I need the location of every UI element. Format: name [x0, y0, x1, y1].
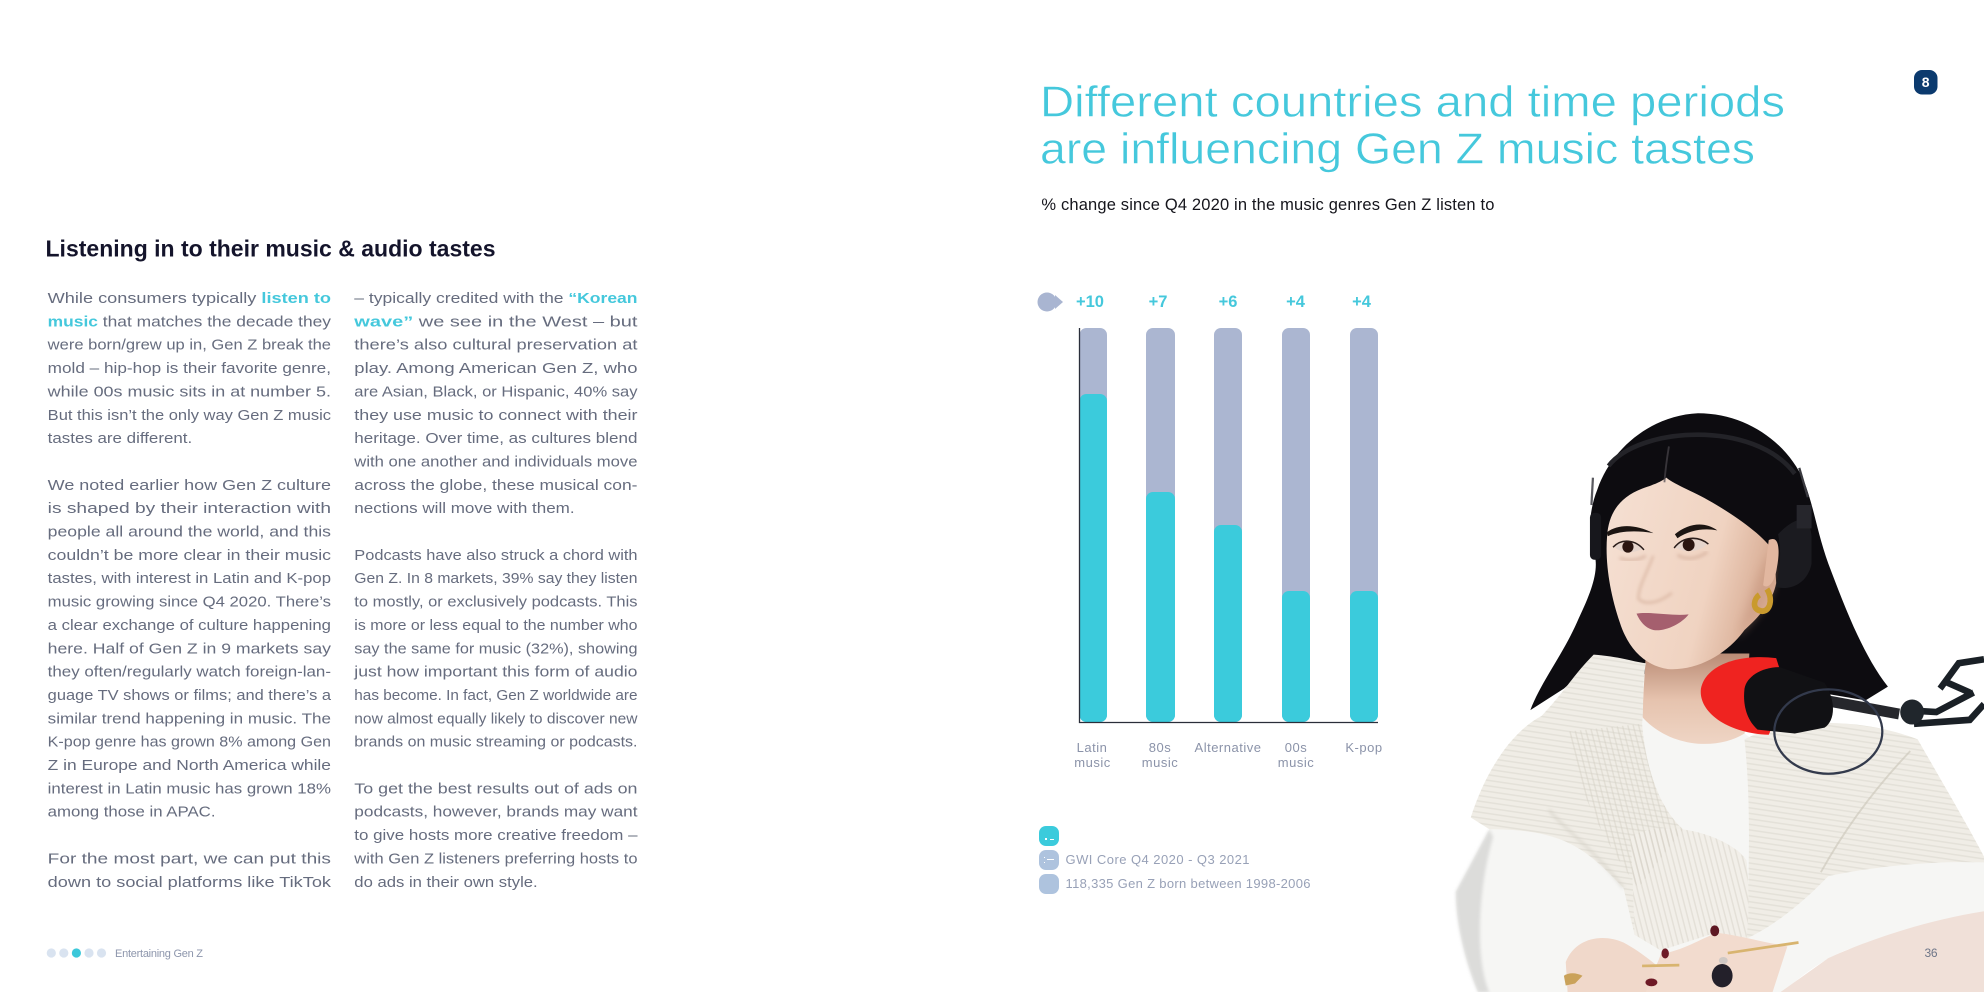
headphones — [1590, 435, 1812, 588]
text column 1: music that matches the decade they — [48, 313, 332, 330]
bar: 80s music — [1146, 328, 1175, 722]
text column 1: similar trend happening in music. The — [48, 710, 331, 727]
text column 1: Z in Europe and North America while — [48, 757, 331, 774]
badge: chart number 8: 8 — [1922, 74, 1930, 90]
bar chart — [1038, 292, 1383, 770]
ear — [1763, 539, 1779, 586]
value labels: +6 — [1219, 293, 1237, 311]
title: Different countries and time periods — [1040, 78, 1785, 127]
text column 2: to give hosts more creative freedom – — [354, 827, 638, 844]
footer: section progress dots and label: Entertaining Gen Z — [115, 948, 203, 960]
text column 1: We noted earlier how Gen Z culture — [48, 477, 331, 494]
text column 2: they use music to connect with their — [354, 407, 638, 424]
text column 2: wave” we see in the West – but — [353, 313, 639, 330]
icon: legend marker — [1038, 292, 1063, 312]
text column 1: tastes, with interest in Latin and K-pop — [48, 570, 331, 587]
microphone — [1701, 657, 1984, 774]
legend and source notes — [1039, 826, 1310, 894]
hands holding pencil — [1564, 925, 1799, 992]
page number: 36 — [1924, 946, 1938, 960]
text column 2: podcasts, however, brands may want — [354, 804, 638, 821]
heading: Listening in: Listening in to their music & audio tastes — [46, 236, 496, 262]
text column 1: While consumers typically listen to — [48, 290, 331, 307]
text column 1: here. Half of Gen Z in 9 markets say — [48, 640, 332, 657]
bar: 00s music — [1282, 328, 1310, 722]
text column 1: For the most part, we can put this — [48, 850, 331, 867]
lips — [1637, 613, 1689, 630]
t-shirt — [1456, 716, 1984, 992]
value labels: +7 — [1149, 293, 1167, 311]
sweater — [1471, 655, 1984, 950]
text column 1: is shaped by their interaction with — [48, 500, 331, 517]
text column 2: across the globe, these musical con- — [354, 477, 638, 494]
bar: Latin music — [1080, 328, 1107, 722]
text column 2: just how important this form of audio — [353, 664, 638, 681]
text column 1: couldn’t be more clear in their music — [48, 547, 332, 564]
text column 2: to mostly, or exclusively podcasts. This — [354, 594, 638, 611]
category labels — [1074, 740, 1383, 770]
value labels: +4 — [1352, 293, 1372, 311]
text column 2: do ads in their own style. — [354, 874, 538, 891]
text column 2: heritage. Over time, as cultures blend — [354, 430, 638, 447]
text column 2: play. Among American Gen Z, who — [354, 360, 638, 377]
text column 2: is more or less equal to the number who — [354, 617, 638, 634]
text column 1: music growing since Q4 2020. There’s — [48, 594, 331, 611]
nose — [1638, 556, 1672, 603]
badge: chart number 8 — [1914, 70, 1938, 94]
base note: 118,335 Gen Z born between 1998-2006 — [1066, 876, 1310, 891]
subtitle: % change since Q4 2020 in the music genres Gen Z listen to — [1041, 196, 1494, 214]
text column 1: down to social platforms like TikTok — [48, 874, 332, 891]
text column 1: interest in Latin music has grown 18% — [48, 780, 331, 797]
text column 1: guage TV shows or films; and there’s a — [48, 687, 332, 704]
base note — [1039, 874, 1310, 894]
text column 1: they often/regularly watch foreign-lan- — [48, 664, 331, 681]
hair — [1530, 413, 1888, 710]
text column 2: with Gen Z listeners preferring hosts to — [353, 850, 638, 867]
category labels: 80s — [1149, 740, 1171, 755]
text column 1: were born/grew up in, Gen Z break the — [47, 337, 331, 354]
category labels: music — [1142, 755, 1178, 770]
text column 1: while 00s music sits in at number 5. — [47, 383, 331, 400]
hair parting and shine — [1664, 446, 1669, 482]
category labels: music — [1278, 755, 1314, 770]
text column 2 — [353, 290, 639, 891]
text column 2: Gen Z. In 8 markets, 39% say they listen — [354, 570, 638, 587]
eyebrows — [1607, 524, 1717, 538]
face — [1607, 478, 1776, 669]
text column 2: – typically credited with the “Korean — [354, 290, 638, 307]
footer: section progress dots and label — [47, 948, 203, 960]
text column 2: Podcasts have also struck a chord with — [354, 547, 638, 564]
category labels: K-pop — [1345, 740, 1383, 755]
category labels: 00s — [1285, 740, 1307, 755]
value labels: +10 — [1076, 293, 1104, 311]
text column 2: there’s also cultural preservation at — [354, 337, 638, 354]
text column 1: a clear exchange of culture happening — [48, 617, 331, 634]
photo: woman with headphones at red microphone — [1456, 413, 1984, 992]
text column 2: now almost equally likely to discover new — [354, 710, 638, 727]
right arm — [1780, 911, 1984, 992]
source note: GWI Core Q4 2020 - Q3 2021 — [1066, 852, 1250, 867]
text column 2: brands on music streaming or podcasts. — [354, 734, 638, 751]
neck — [1642, 653, 1749, 747]
eyes — [1613, 538, 1708, 560]
title: are influencing Gen Z music tastes — [1040, 124, 1755, 173]
source note — [1039, 850, 1250, 870]
text column 2: are Asian, Black, or Hispanic, 40% say — [354, 383, 638, 400]
text column 1: among those in APAC. — [48, 804, 216, 821]
text column 2: with one another and individuals move — [353, 454, 638, 470]
value labels: +4 — [1286, 293, 1306, 311]
text column 1: people all around the world, and this — [48, 524, 331, 540]
category labels: Alternative — [1195, 740, 1261, 755]
text column 2: say the same for music (32%), showing — [354, 640, 638, 657]
title — [1040, 78, 1785, 173]
text column 1: K-pop genre has grown 8% among Gen — [48, 734, 331, 751]
bar: K-pop — [1350, 328, 1378, 722]
value labels — [1076, 293, 1372, 311]
bar: Alternative — [1214, 328, 1242, 722]
earring — [1755, 589, 1770, 611]
icon: question — [1039, 826, 1059, 846]
text column 2: has become. In fact, Gen Z worldwide are — [354, 687, 638, 704]
text column 1: tastes are different. — [48, 430, 192, 447]
category labels: music — [1074, 755, 1111, 770]
category labels: Latin — [1077, 740, 1107, 755]
text column 1: But this isn’t the only way Gen Z music — [48, 407, 332, 424]
text column 1 — [47, 290, 332, 891]
text column 2: nections will move with them. — [354, 500, 575, 517]
text column 2: To get the best results out of ads on — [354, 780, 638, 797]
text column 1: mold – hip-hop is their favorite genre, — [48, 360, 331, 377]
